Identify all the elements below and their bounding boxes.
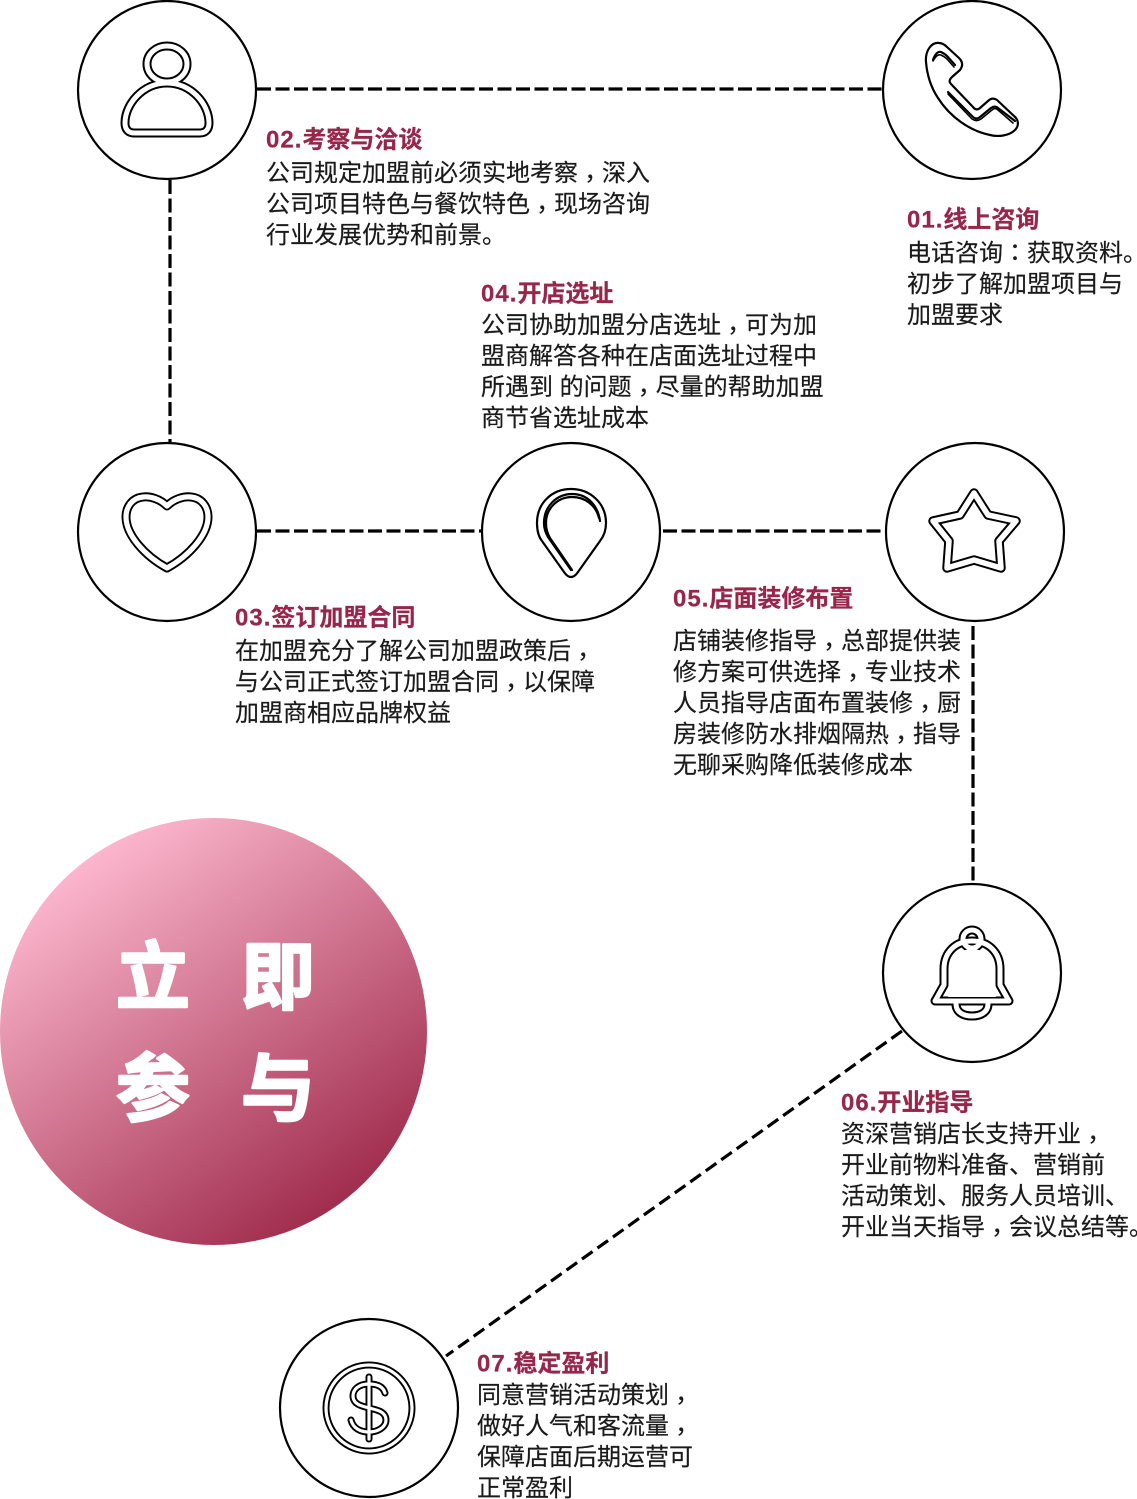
text block: 04 开店选址: 尽量的帮助加盟	[656, 374, 824, 401]
text block: 05 店面装修布置: 厨	[937, 690, 961, 717]
text block: 05 店面装修布置: ，	[913, 689, 937, 724]
text block: 01 线上咨询: 加盟要求	[907, 302, 1003, 329]
text block: 07 稳定盈利: 07.稳定盈利	[477, 1350, 609, 1378]
text block: 02 考察与洽谈: 行业发展优势和前景。	[266, 222, 506, 249]
text block: 04 开店选址: ，	[632, 373, 656, 408]
text block: 04 开店选址: 盟商解答各种在店面选址过程中	[481, 343, 817, 370]
text block: 03 签订加盟合同: ，	[571, 637, 595, 672]
call to action circle: 立即参与: 即	[241, 918, 315, 1025]
text block: 05 店面装修布置	[673, 586, 961, 779]
call to action circle: 立即参与: 立	[116, 918, 190, 1025]
text block: 07 稳定盈利	[477, 1350, 693, 1499]
text block: 05 店面装修布置: 房装修防水排烟隔热	[673, 721, 889, 748]
text block: 03 签订加盟合同: 加盟商相应品牌权益	[235, 700, 451, 727]
text block: 04 开店选址: 所遇到 的问题	[481, 374, 632, 401]
connector: 02 to 03	[168, 180, 172, 442]
text block: 05 店面装修布置: 专业技术	[865, 659, 961, 686]
text block: 07 稳定盈利: ，	[669, 1381, 693, 1416]
text block: 01 线上咨询	[907, 206, 1137, 329]
text block: 06 开业指导: 活动策划、服务人员培训、	[841, 1183, 1129, 1210]
text block: 04 开店选址	[481, 280, 824, 432]
text block: 06 开业指导: ，	[985, 1213, 1009, 1248]
text block: 06 开业指导	[841, 1090, 1137, 1248]
text block: 03 签订加盟合同: ，	[499, 668, 523, 703]
call to action circle: 立即参与: 与	[241, 1030, 315, 1137]
text block: 06 开业指导: 开业当天指导	[841, 1214, 985, 1241]
text block: 05 店面装修布置: ，	[841, 658, 865, 693]
text block: 03 签订加盟合同: 03.签订加盟合同	[235, 604, 415, 632]
text block: 02 考察与洽谈: 02.考察与洽谈	[266, 126, 422, 154]
text block: 05 店面装修布置: 无聊采购降低装修成本	[673, 752, 913, 779]
text block: 03 签订加盟合同: 在加盟充分了解公司加盟政策后	[235, 638, 571, 665]
text block: 05 店面装修布置: 总部提供装	[841, 628, 961, 655]
call to action circle: 立即参与	[0, 818, 427, 1245]
connector: 05 to 06	[971, 626, 975, 884]
text block: 04 开店选址: 可为加	[745, 312, 817, 339]
node: heart icon	[78, 443, 256, 621]
text block: 03 签订加盟合同: 与公司正式签订加盟合同	[235, 669, 499, 696]
node: bell icon	[883, 884, 1061, 1062]
text block: 05 店面装修布置: 修方案可供选择	[673, 659, 841, 686]
text block: 02 考察与洽谈	[266, 126, 650, 249]
connector: 02 to 01	[257, 87, 882, 91]
text block: 04 开店选址: 商节省选址成本	[481, 405, 649, 432]
connector: 04 to 05	[663, 529, 885, 533]
node: star icon	[886, 443, 1064, 621]
text block: 02 考察与洽谈: 公司项目特色与餐饮特色	[266, 191, 530, 218]
text block: 06 开业指导: 开业前物料准备、营销前	[841, 1152, 1105, 1179]
text block: 03 签订加盟合同: 以保障	[523, 669, 595, 696]
node: map pin icon	[482, 443, 660, 621]
text block: 05 店面装修布置: 人员指导店面布置装修	[673, 690, 913, 717]
connector: 06 to 07	[446, 1031, 902, 1356]
text block: 07 稳定盈利: 同意营销活动策划	[477, 1382, 669, 1409]
text block: 05 店面装修布置: 店铺装修指导	[673, 628, 817, 655]
node: dollar icon	[280, 1319, 458, 1497]
text block: 06 开业指导: 06.开业指导	[841, 1090, 973, 1116]
text block: 04 开店选址: 公司协助加盟分店选址	[481, 312, 721, 339]
text block: 02 考察与洽谈: ，	[530, 190, 554, 225]
text block: 03 签订加盟合同	[235, 604, 595, 727]
text block: 05 店面装修布置: ，	[817, 627, 841, 662]
node: phone icon	[883, 1, 1061, 179]
text block: 05 店面装修布置: 05.店面装修布置	[673, 586, 853, 612]
text block: 07 稳定盈利: 做好人气和客流量	[477, 1413, 669, 1440]
text block: 05 店面装修布置: 指导	[913, 721, 961, 748]
text block: 05 店面装修布置: ，	[889, 720, 913, 755]
text block: 04 开店选址: 04.开店选址	[481, 280, 613, 308]
text block: 02 考察与洽谈: 公司规定加盟前必须实地考察	[266, 160, 578, 187]
text block: 07 稳定盈利: 保障店面后期运营可	[477, 1444, 693, 1471]
text block: 01 线上咨询: 初步了解加盟项目与	[907, 271, 1123, 298]
text block: 02 考察与洽谈: 现场咨询	[554, 191, 650, 218]
connector: 03 to 04	[257, 529, 481, 533]
call to action circle: 立即参与: 参	[116, 1030, 190, 1137]
text block: 04 开店选址: ，	[721, 311, 745, 346]
text block: 06 开业指导: ，	[1081, 1120, 1105, 1155]
text block: 07 稳定盈利: ，	[669, 1412, 693, 1447]
text block: 01 线上咨询: 01.线上咨询	[907, 206, 1039, 234]
node: person icon	[78, 1, 256, 179]
text block: 02 考察与洽谈: 深入	[602, 160, 650, 187]
text block: 02 考察与洽谈: ，	[578, 159, 602, 194]
text block: 06 开业指导: 资深营销店长支持开业	[841, 1121, 1081, 1148]
